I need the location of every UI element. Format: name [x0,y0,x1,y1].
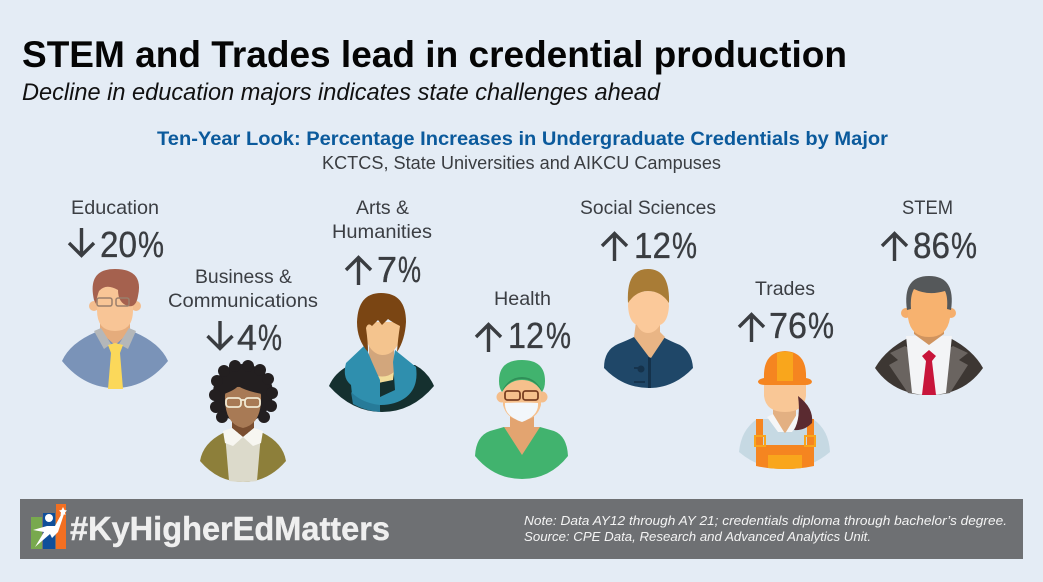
value: up 12%: % [546,315,571,356]
value: down 4%: 4 [237,317,257,358]
icon: man with glasses and yellow tie [62,269,168,389]
value: up 7%: 7 [377,249,397,290]
note and source [524,513,1007,544]
value: up 86%: 86 [913,225,950,266]
icon: woman with blonde hair and navy blouse [604,269,693,388]
panel: STEM [875,197,983,395]
icon: health worker with surgical cap and mask [475,360,568,479]
panel: Trades [739,278,834,469]
label: Arts & Humanities: Humanities [332,221,432,243]
icon: construction worker with orange hard hat [739,351,830,469]
value: down 4%: % [258,317,282,358]
value: up 76%: % [808,305,834,346]
panel: Social Sciences [580,197,716,388]
value: up 12% [476,315,571,356]
value: up 86%: % [951,225,977,266]
value: up 12%: 12 [508,315,544,356]
label: Business & Communications: Business & [195,266,292,288]
note and source: Source: CPE Data, Research and Advanced Analytics Unit. [524,529,871,544]
value: up 12%: 12 [634,225,671,266]
label: Arts & Humanities: Arts & [356,197,409,219]
icon: CPE logo [31,504,67,549]
label: Business & Communications: Communications [168,290,318,312]
hashtag: #KyHigherEdMatters [70,510,390,547]
value: up 12% [602,225,697,266]
value: down 20%: 20 [100,224,137,265]
label: Trades: Trades [755,278,815,300]
value: down 20% [69,224,164,265]
label: Health: Health [494,288,551,310]
value: up 76%: 76 [769,305,807,346]
note and source: Note: Data AY12 through AY 21; credentials diploma through bachelor’s degree. [524,513,1007,528]
panel: Health [475,288,571,479]
footer band [20,499,1023,559]
chart subheading: KCTCS, State Universities and AIKCU Campuses [322,153,721,173]
value: down 20%: % [138,224,164,265]
value: up 7% [346,249,421,290]
value: up 12%: % [672,225,697,266]
icon: person with brown hair and teal scarf [329,293,434,412]
panel: Arts & Humanities [329,197,434,412]
icon: man in grey suit and red tie [875,276,983,395]
panel: Business & Communications [168,266,318,482]
value: up 86% [882,225,977,266]
subtitle: Decline in education majors indicates state challenges ahead [22,79,661,106]
label: Social Sciences: Social Sciences [580,197,716,219]
value: down 4% [208,317,282,358]
value: up 76% [739,305,834,346]
panel: Education [62,197,168,389]
label: Education: Education [71,197,159,219]
icon: woman with curly hair and olive jacket [200,360,286,482]
chart heading: Ten-Year Look: Percentage Increases in Undergraduate Credentials by Major [157,128,888,150]
label: STEM: STEM [902,197,953,219]
value: up 7%: % [398,249,421,290]
label: Business & Communications [168,266,318,312]
title: STEM and Trades lead in credential production [22,34,847,75]
label: Arts & Humanities [332,197,432,243]
